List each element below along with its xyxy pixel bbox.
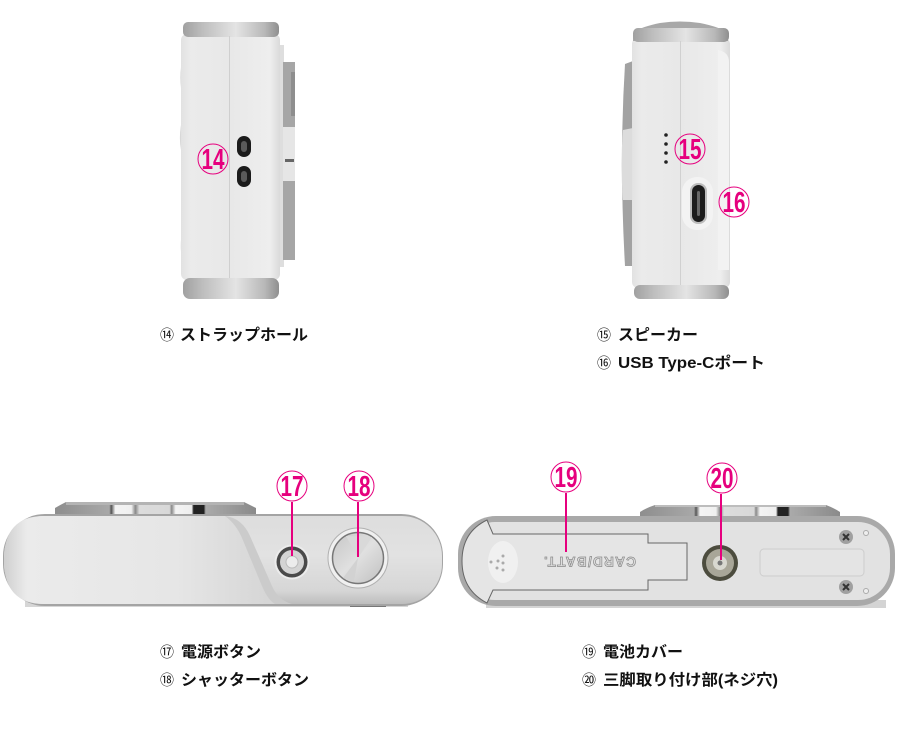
label: strap hole: ⑭ (160, 325, 174, 345)
camera: top view (3, 502, 443, 607)
label: USB port: ⑯ (597, 353, 611, 373)
camera: left side view (180, 22, 295, 299)
marker 20: 20 (710, 463, 734, 495)
grip surface (4, 516, 290, 604)
label: tripod mount: 三脚取り付け部(ネジ穴) (603, 670, 778, 689)
label: battery cover: ⑲ (582, 642, 596, 662)
label: shutter button: ⑱ (160, 670, 174, 690)
camera: right side view (622, 22, 730, 299)
marker 17 (277, 471, 307, 556)
marker 17: 17 (280, 471, 304, 503)
tripod mount (702, 545, 738, 581)
strap holes (237, 136, 251, 187)
marker 18: 18 (348, 471, 370, 503)
label: shutter button: シャッターボタン (181, 671, 309, 689)
battery door (462, 520, 687, 603)
marker 20 (707, 463, 737, 560)
shutter button (328, 528, 388, 588)
label: speaker: スピーカー (618, 326, 698, 344)
marker 15: 15 (678, 134, 702, 166)
camera: bottom view (458, 505, 895, 608)
grip ridge (225, 516, 292, 604)
label plate (760, 549, 864, 576)
label: speaker (597, 325, 698, 345)
lens barrel side (622, 61, 633, 266)
label: power button: 電源ボタン (181, 643, 261, 661)
lens ring (640, 505, 840, 516)
marker 19: 19 (554, 462, 578, 494)
battery door: CARD/BATT. (544, 554, 636, 569)
label: tripod mount: ⑳ (582, 670, 596, 690)
marker 14: 14 (202, 144, 224, 176)
power button (274, 544, 310, 580)
lens barrel side (279, 45, 295, 267)
label: battery cover (582, 642, 683, 662)
speaker holes (664, 133, 668, 164)
label: power button (160, 642, 261, 662)
marker 16: 16 (722, 187, 746, 219)
label: speaker: ⑮ (597, 325, 611, 345)
USB Type-C port (682, 177, 713, 230)
side buttons (180, 58, 183, 254)
label: battery cover: 電池カバー (603, 643, 683, 661)
marker 19 (551, 462, 581, 552)
label: strap hole: ストラップホール (180, 326, 309, 344)
label: USB port (597, 353, 765, 373)
lens ring (55, 502, 256, 514)
screws (839, 530, 868, 594)
label: power button: ⑰ (160, 642, 174, 662)
marker 18 (344, 471, 374, 557)
label: USB port: USB Type-Cポート (618, 354, 765, 372)
